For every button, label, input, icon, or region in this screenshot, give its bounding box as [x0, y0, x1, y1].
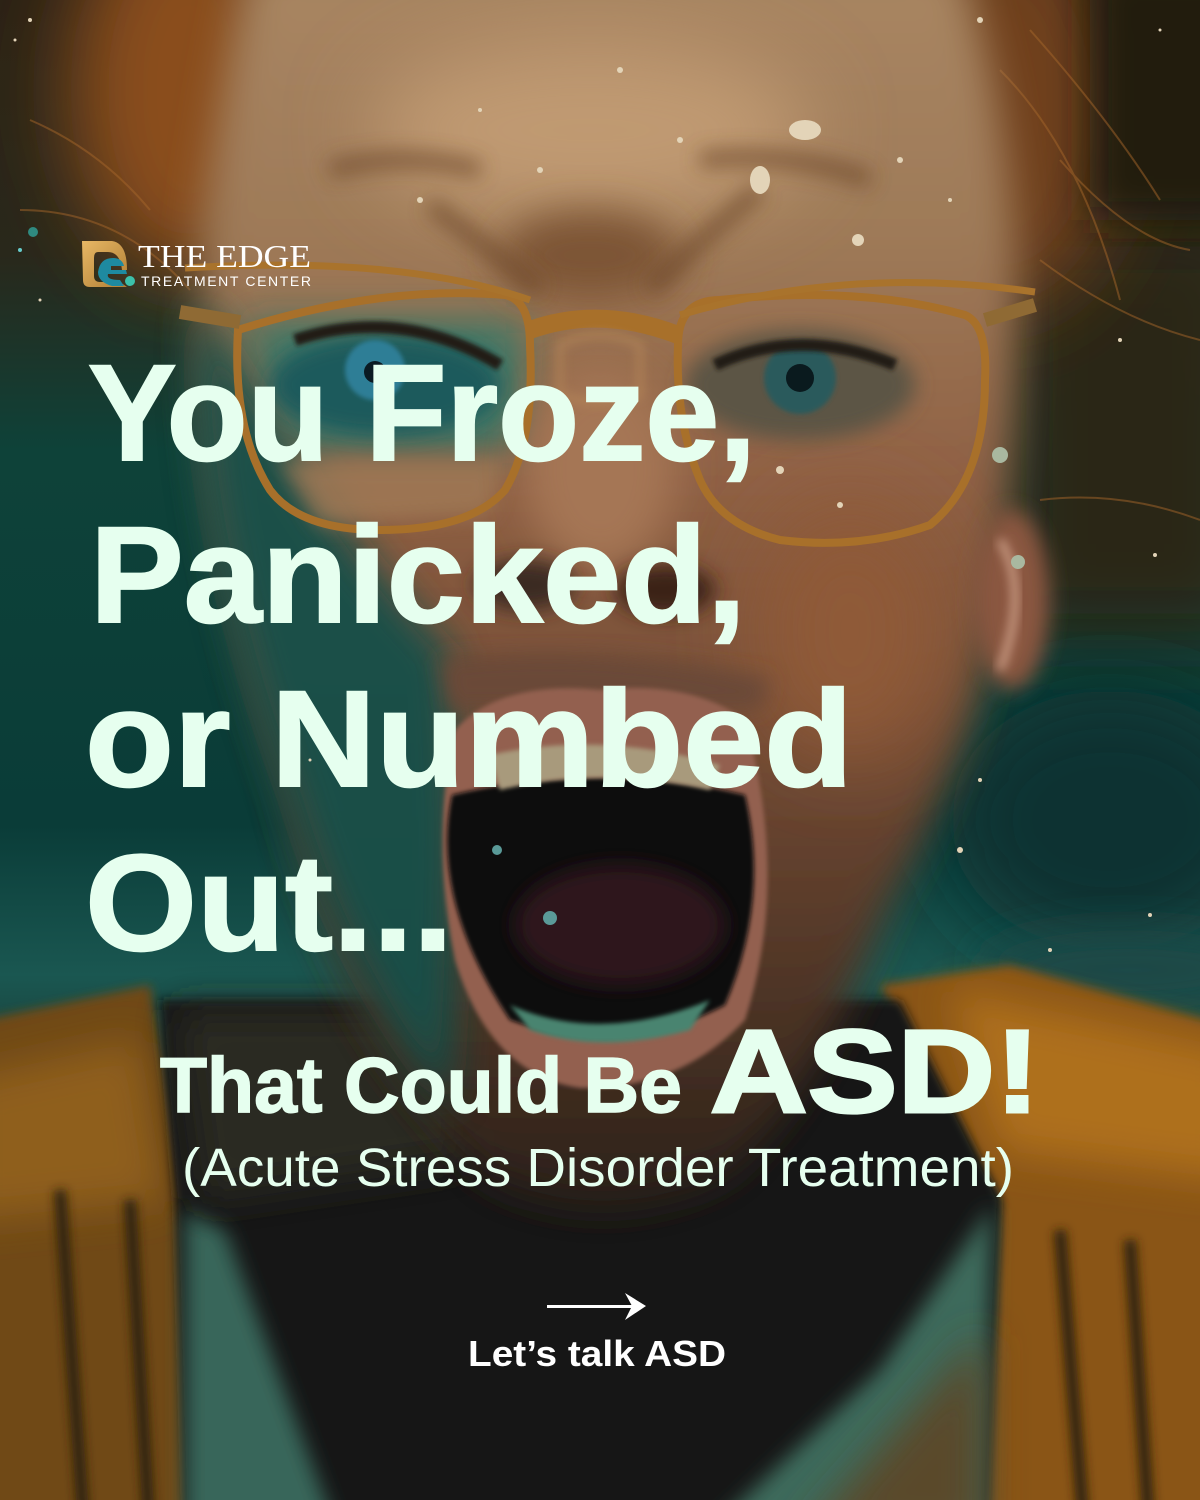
mouth: [442, 688, 768, 1088]
face: forehead highlight and furrows: [370, 40, 810, 220]
sweater right: [880, 965, 1200, 1500]
sweater left: [0, 985, 190, 1500]
logo wordmark: THE EDGE: [138, 238, 311, 274]
droplets: [14, 17, 1162, 952]
arrow: [547, 1293, 646, 1320]
nose: [525, 370, 675, 570]
call to action: Let’s talk ASD: [468, 1333, 726, 1374]
subheading: That Could Be ASD: [160, 1006, 1040, 1138]
face: [199, 0, 1018, 1208]
hair strands: [20, 30, 1200, 520]
headline line 2: Panicked,: [90, 499, 746, 652]
eyes: [270, 335, 500, 435]
headline line 3: or Numbed: [85, 663, 853, 816]
subheading lead-in: That Could Be: [160, 1041, 682, 1129]
logo tagline: TREATMENT CENTER: [141, 273, 311, 289]
face: right cheek: [750, 500, 950, 760]
logo: The Edge Treatment Center: [82, 238, 311, 289]
headline line 4: Out...: [85, 827, 453, 980]
icon: logo mark: [82, 241, 135, 287]
glasses: [180, 265, 1035, 543]
face: teal shadow left side: [197, 300, 460, 1110]
neck and collar: [160, 1000, 1000, 1500]
headline line 1: You Froze,: [88, 337, 756, 490]
headline: [85, 337, 853, 980]
subheading ASD emphasis: ASD!: [710, 1006, 1040, 1138]
sweater ribbing: [60, 1190, 1150, 1500]
parenthetical: Acute Stress Disorder Treatment: (Acute Stress Disorder Treatment): [182, 1138, 1014, 1198]
hair mass: [70, 0, 310, 280]
